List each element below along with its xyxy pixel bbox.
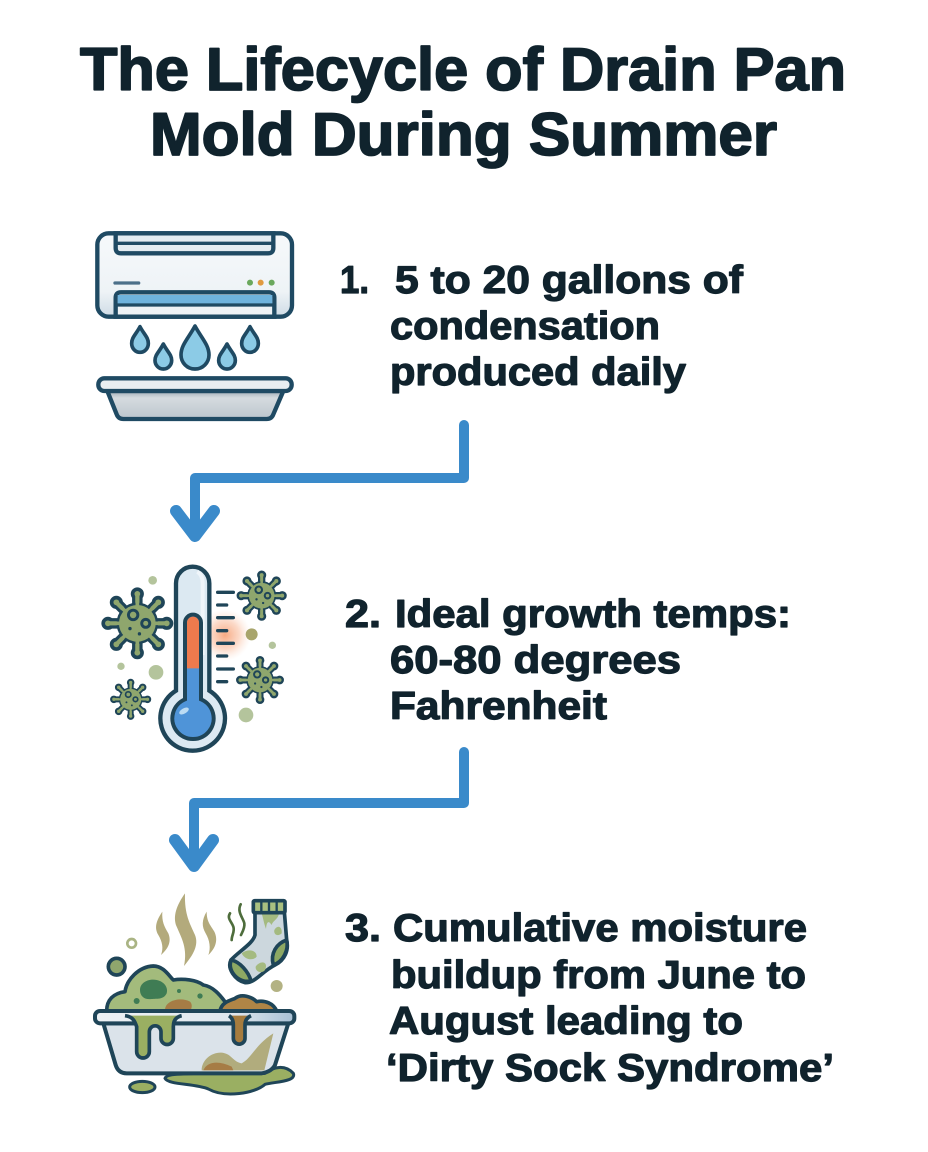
air conditioner unit (97, 233, 292, 317)
stink lines (156, 893, 216, 966)
mold heaps (107, 966, 277, 1011)
arrow: step 2 to step 3 (175, 752, 464, 866)
text: step 1: condensation (390, 305, 660, 348)
text: step 3: 3. (345, 907, 381, 950)
spore dots (117, 576, 276, 722)
temperature ticks (218, 592, 233, 682)
heat glow (199, 609, 251, 661)
drain pan (98, 378, 292, 419)
spore bubbles (108, 939, 283, 992)
slime puddles behind tub (130, 1067, 294, 1094)
text: step 2: 2. (345, 593, 381, 636)
mold spores (103, 572, 285, 719)
text: step 2: Fahrenheit (390, 685, 607, 728)
icon: thermometer with mold spores (103, 567, 285, 751)
text: step 2: Ideal growth temps: (395, 593, 791, 636)
text: step 3 (345, 907, 834, 1090)
icon: moldy drain pan and dirty sock (95, 893, 294, 1094)
text: step 1: 5 to 20 gallons of (395, 259, 744, 302)
text: step 1 (340, 259, 744, 394)
text: step 3: August leading to (389, 1000, 743, 1043)
text: step 1: produced daily (390, 351, 686, 394)
text: step 3: Cumulative moisture (393, 907, 807, 950)
slime drips (125, 1016, 251, 1058)
text: step 3: buildup from June to (391, 954, 806, 997)
arrow: step 1 to step 2 (176, 425, 464, 536)
dirty sock (230, 901, 287, 983)
text: step 1: 1. (340, 259, 369, 302)
water drops (132, 326, 258, 369)
icon: air conditioner dripping into pan (97, 233, 292, 419)
text: step 2: 60-80 degrees (390, 639, 681, 682)
tub (95, 1011, 294, 1073)
title (80, 36, 846, 168)
title: Mold During Summer (150, 101, 777, 168)
text: step 3: ‘Dirty Sock Syndrome’ (386, 1047, 834, 1090)
thermometer (160, 567, 225, 751)
title: The Lifecycle of Drain Pan (80, 36, 846, 103)
text: step 2 (345, 593, 791, 728)
